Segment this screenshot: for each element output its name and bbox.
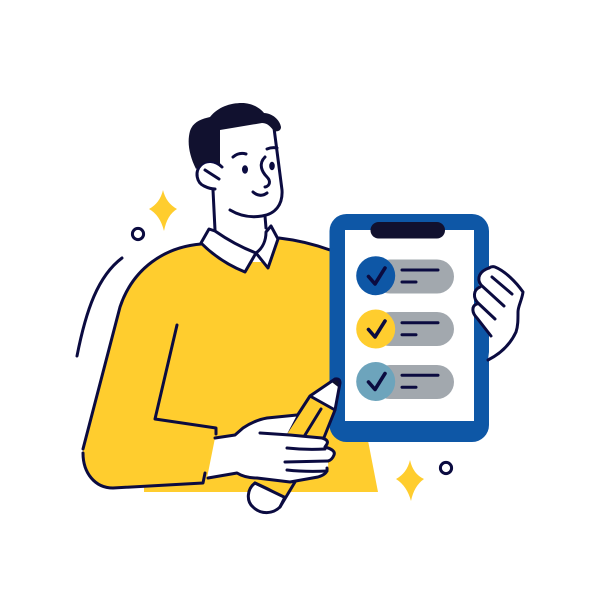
inner ear <box>205 170 219 179</box>
fingertips <box>322 438 334 461</box>
sleeve fold <box>155 325 216 434</box>
right shoulder outline <box>279 238 330 250</box>
pencil lower outline <box>255 482 295 507</box>
sparkle: lower right <box>396 460 424 501</box>
finger contour one <box>479 268 504 306</box>
clip <box>370 222 445 238</box>
hair <box>189 103 281 169</box>
smile <box>253 192 267 195</box>
pencil tip <box>310 379 340 410</box>
ear <box>197 161 222 189</box>
eye right <box>269 162 275 170</box>
clipboard <box>330 214 489 442</box>
motion arc <box>77 258 122 356</box>
circle: lower right <box>440 462 452 474</box>
circle: upper left <box>132 228 144 240</box>
eraser <box>248 483 285 513</box>
right hand over clipboard <box>473 267 523 360</box>
sweater outline <box>83 244 201 449</box>
finger lines <box>260 433 328 471</box>
pencil <box>248 379 340 513</box>
hand outer outline <box>488 267 523 360</box>
nose <box>261 157 269 187</box>
left hand <box>207 415 334 482</box>
pencil barrel <box>284 396 335 440</box>
collar left <box>201 229 256 272</box>
sweater body <box>83 238 378 492</box>
collar right <box>256 226 278 268</box>
eye left <box>242 165 248 174</box>
pencil outline <box>284 379 340 440</box>
finger contour three <box>473 304 491 336</box>
paper <box>345 230 474 421</box>
hand upper outline <box>215 415 297 438</box>
clipboard board <box>330 214 489 442</box>
sweater lower outline <box>83 453 205 488</box>
jaw line <box>230 128 282 217</box>
sparkle: upper left <box>149 190 177 231</box>
item 2 <box>356 310 454 348</box>
neck left line <box>213 190 215 230</box>
pencil lead <box>331 379 340 388</box>
eyebrow right <box>267 148 277 149</box>
eyebrow left <box>233 153 246 157</box>
pencil lower body <box>258 480 296 497</box>
item 3 <box>356 362 454 401</box>
illustration: man with clipboard <box>77 103 523 513</box>
finger crease one <box>492 277 512 294</box>
pencil center line <box>305 409 321 435</box>
collar <box>201 226 278 272</box>
item 1 <box>356 256 454 295</box>
hand lower outline <box>208 468 327 482</box>
neck and face <box>189 103 282 254</box>
finger contour two <box>474 287 495 319</box>
neck right line <box>265 216 266 228</box>
